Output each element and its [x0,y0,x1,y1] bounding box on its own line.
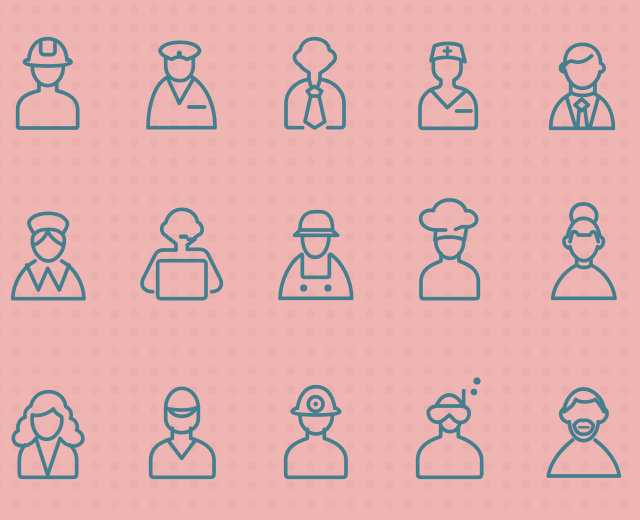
icon: workman in overalls [280,212,352,298]
icon: businessman with tie [286,39,344,128]
icon: miner with head lamp [286,387,346,477]
icon: scuba diver [418,377,482,477]
icon: man in cap [151,388,214,477]
icon: nurse [420,43,476,128]
icon: woman with curly hair [13,392,83,477]
icon: officer with cap and collar [13,213,84,299]
icon: police officer [148,42,215,128]
icon: woman with hair bun [553,204,615,298]
icon: chef [421,200,478,299]
icon: man in suit [551,44,613,128]
icon: bearded man [548,389,619,476]
icon: construction worker [18,39,78,128]
icon: call centre operator at laptop [142,209,221,299]
